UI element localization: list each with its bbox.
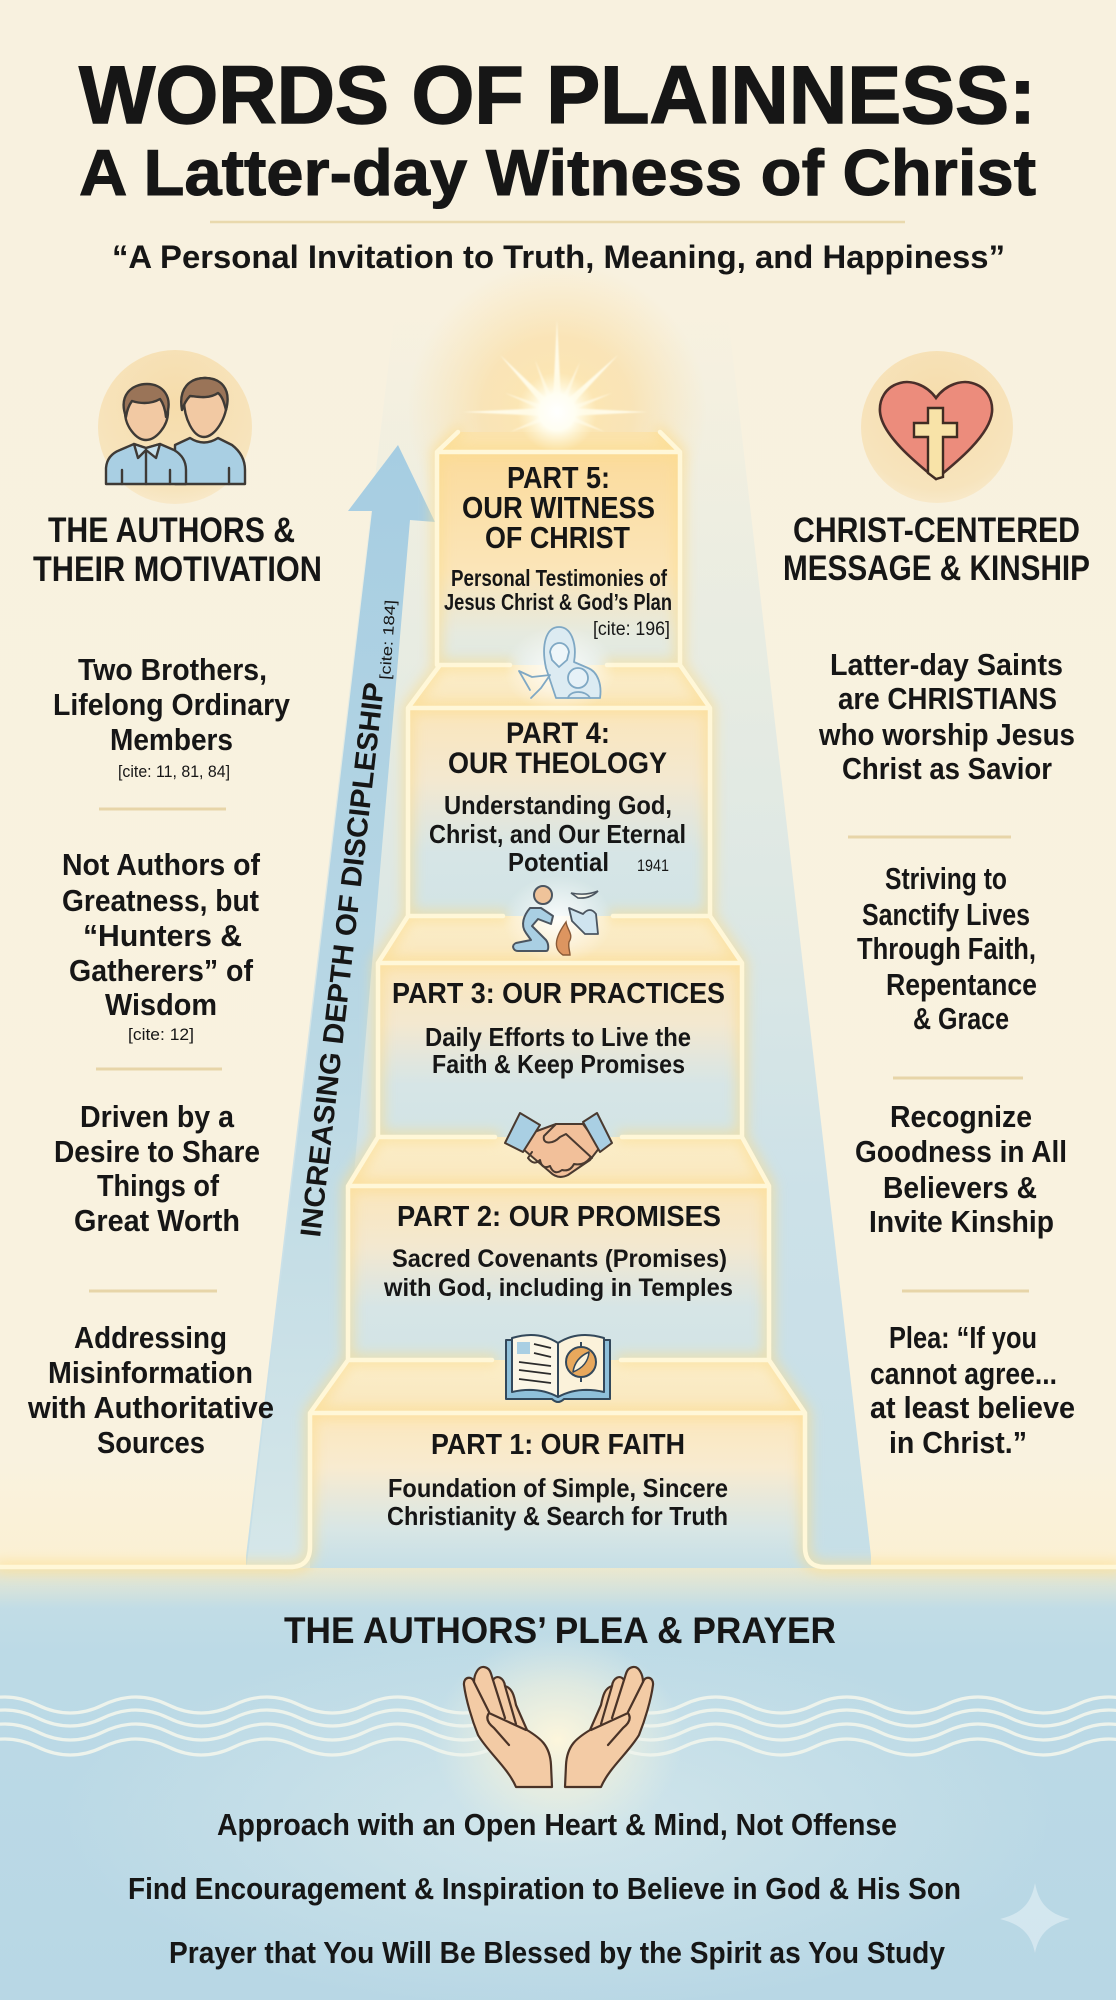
step: part 2 [383, 1201, 733, 1302]
arrow: increasing depth of discipleship [246, 445, 435, 1572]
point: plea: Plea: “If you [889, 1320, 1037, 1355]
point: addressing misinformation: with Authoritative [27, 1390, 274, 1425]
step: part 2: PART 2: OUR PROMISES [397, 1201, 721, 1233]
point: hunters and gatherers [62, 847, 261, 1044]
bottom section background [0, 1568, 1116, 2000]
point: latter-day saints: are CHRISTIANS [838, 681, 1057, 716]
point: latter-day saints: Christ as Savior [842, 751, 1052, 786]
left column: the authors [27, 350, 322, 1460]
step: part 5 [444, 460, 672, 640]
point: hunters and gatherers: [cite: 12] [128, 1025, 194, 1044]
icon: heart with cross [861, 351, 1013, 503]
step: part 1: PART 1: OUR FAITH [431, 1429, 685, 1461]
point: addressing misinformation: Addressing [74, 1320, 227, 1355]
title line 2: A Latter-day Witness of Christ [79, 136, 1036, 209]
point: desire to share: Driven by a [80, 1099, 235, 1134]
closing statements [128, 1807, 961, 1970]
step: part 5: OUR WITNESS [462, 490, 655, 525]
step: part 5: Personal Testimonies of [451, 565, 667, 591]
step: part 4: PART 4: [506, 717, 610, 750]
step: part 5: Jesus Christ & God’s Plan [444, 589, 672, 615]
step: part 1: Christianity & Search for Truth [387, 1501, 728, 1531]
icon: radiant star above the top step [463, 320, 647, 452]
light beam behind the stairs [246, 306, 871, 1572]
closing statements: Find Encouragement & Inspiration to Believe in God & His Son [128, 1871, 961, 1906]
point: hunters and gatherers: Wisdom [105, 987, 217, 1022]
title line 1: WORDS OF PLAINNESS: [79, 50, 1036, 141]
icon: handshake [505, 1113, 612, 1177]
title block [79, 50, 1036, 209]
arrow citation: [cite: 184] [377, 599, 400, 680]
step: part 3: PART 3: OUR PRACTICES [392, 978, 725, 1010]
point: latter-day saints [818, 647, 1075, 786]
heading: the authors' plea and prayer: THE AUTHORS’ PLEA & PRAYER [284, 1610, 836, 1651]
point: plea: in Christ.” [889, 1425, 1027, 1460]
point: hunters and gatherers: “Hunters & [83, 918, 242, 953]
heading: the authors and their motivation: THEIR MOTIVATION [33, 550, 322, 589]
point: striving to sanctify lives [857, 861, 1037, 1036]
point: two brothers: Members [110, 722, 233, 757]
point: two brothers: Two Brothers, [78, 652, 267, 687]
step: part 4: 1941 [637, 856, 669, 875]
point: addressing misinformation [27, 1320, 274, 1460]
point: latter-day saints: who worship Jesus [818, 717, 1075, 752]
point: two brothers: Lifelong Ordinary [53, 687, 291, 722]
step: part 5: OF CHRIST [485, 520, 630, 555]
point: recognize goodness: Goodness in All [855, 1134, 1067, 1169]
step: part 4: Understanding God, [444, 790, 672, 820]
point: hunters and gatherers: Greatness, but [62, 883, 259, 918]
heading: christ-centered message and kinship: CHRIST-CENTERED [793, 511, 1080, 550]
point: desire to share: Desire to Share [54, 1134, 260, 1169]
point: striving to sanctify lives: Repentance [886, 967, 1037, 1002]
step: part 4: Christ, and Our Eternal [429, 819, 686, 849]
right hand [565, 1667, 653, 1787]
closing statements: Prayer that You Will Be Blessed by the Spirit as You Study [169, 1935, 946, 1970]
point: two brothers: [cite: 11, 81, 84] [118, 762, 230, 781]
right column: christ-centered message [783, 351, 1090, 1460]
left hand [464, 1667, 552, 1787]
heading: the authors and their motivation [33, 511, 322, 589]
stairs: step fills [310, 262, 805, 1568]
point: addressing misinformation: Misinformation [48, 1355, 253, 1390]
step: part 3: Faith & Keep Promises [432, 1049, 685, 1079]
point: plea: at least believe [870, 1390, 1075, 1425]
point: recognize goodness: Recognize [890, 1099, 1032, 1134]
point: latter-day saints: Latter-day Saints [830, 647, 1063, 682]
point: desire to share [54, 1099, 260, 1238]
point: hunters and gatherers: Not Authors of [62, 847, 261, 882]
point: recognize goodness: Invite Kinship [869, 1204, 1054, 1239]
point: hunters and gatherers: Gatherers” of [69, 953, 254, 988]
arrow label: INCREASING DEPTH OF DISCIPLESHIP [295, 681, 391, 1239]
step: part 4: OUR THEOLOGY [448, 747, 667, 780]
icon: two brothers [98, 350, 252, 504]
point: recognize goodness [855, 1099, 1067, 1239]
step: part 4 [429, 717, 686, 877]
icon: open book with compass [506, 1335, 610, 1402]
step: part 1 [387, 1429, 728, 1531]
closing statements: Approach with an Open Heart & Mind, Not Offense [217, 1807, 897, 1842]
icon: Christ with child and dove [504, 626, 616, 714]
icon: open praying hands [464, 1667, 653, 1787]
stairs: glowing outline [0, 432, 1116, 1567]
step: part 4: Potential [508, 847, 609, 877]
point: striving to sanctify lives: & Grace [913, 1001, 1009, 1036]
step: part 2: Sacred Covenants (Promises) [392, 1245, 727, 1273]
subtitle: “A Personal Invitation to Truth, Meaning, and Happiness” [112, 239, 1005, 275]
page background [0, 0, 1116, 1570]
icon: kneeling figure with dove and flame [503, 876, 613, 964]
heading: the authors and their motivation: THE AUTHORS & [48, 511, 295, 550]
step: part 2: with God, including in Temples [383, 1274, 733, 1302]
step: part 3: Daily Efforts to Live the [425, 1022, 691, 1052]
point: striving to sanctify lives: Through Faith, [857, 931, 1036, 966]
heading: christ-centered message and kinship [783, 511, 1090, 588]
wave lines [0, 1697, 1116, 1755]
step: part 5: PART 5: [507, 460, 610, 495]
point: recognize goodness: Believers & [883, 1170, 1037, 1205]
step: part 1: Foundation of Simple, Sincere [388, 1473, 728, 1503]
point: plea [870, 1320, 1075, 1460]
step: part 5: [cite: 196] [593, 619, 670, 640]
point: plea: cannot agree... [870, 1356, 1057, 1391]
point: striving to sanctify lives: Striving to [885, 861, 1007, 896]
point: desire to share: Things of [97, 1168, 220, 1203]
point: two brothers [53, 652, 291, 781]
icon: sparkle watermark [1000, 1883, 1070, 1953]
step: part 3 [392, 978, 725, 1079]
point: addressing misinformation: Sources [97, 1425, 205, 1460]
point: striving to sanctify lives: Sanctify Lives [862, 897, 1030, 932]
point: desire to share: Great Worth [74, 1203, 240, 1238]
